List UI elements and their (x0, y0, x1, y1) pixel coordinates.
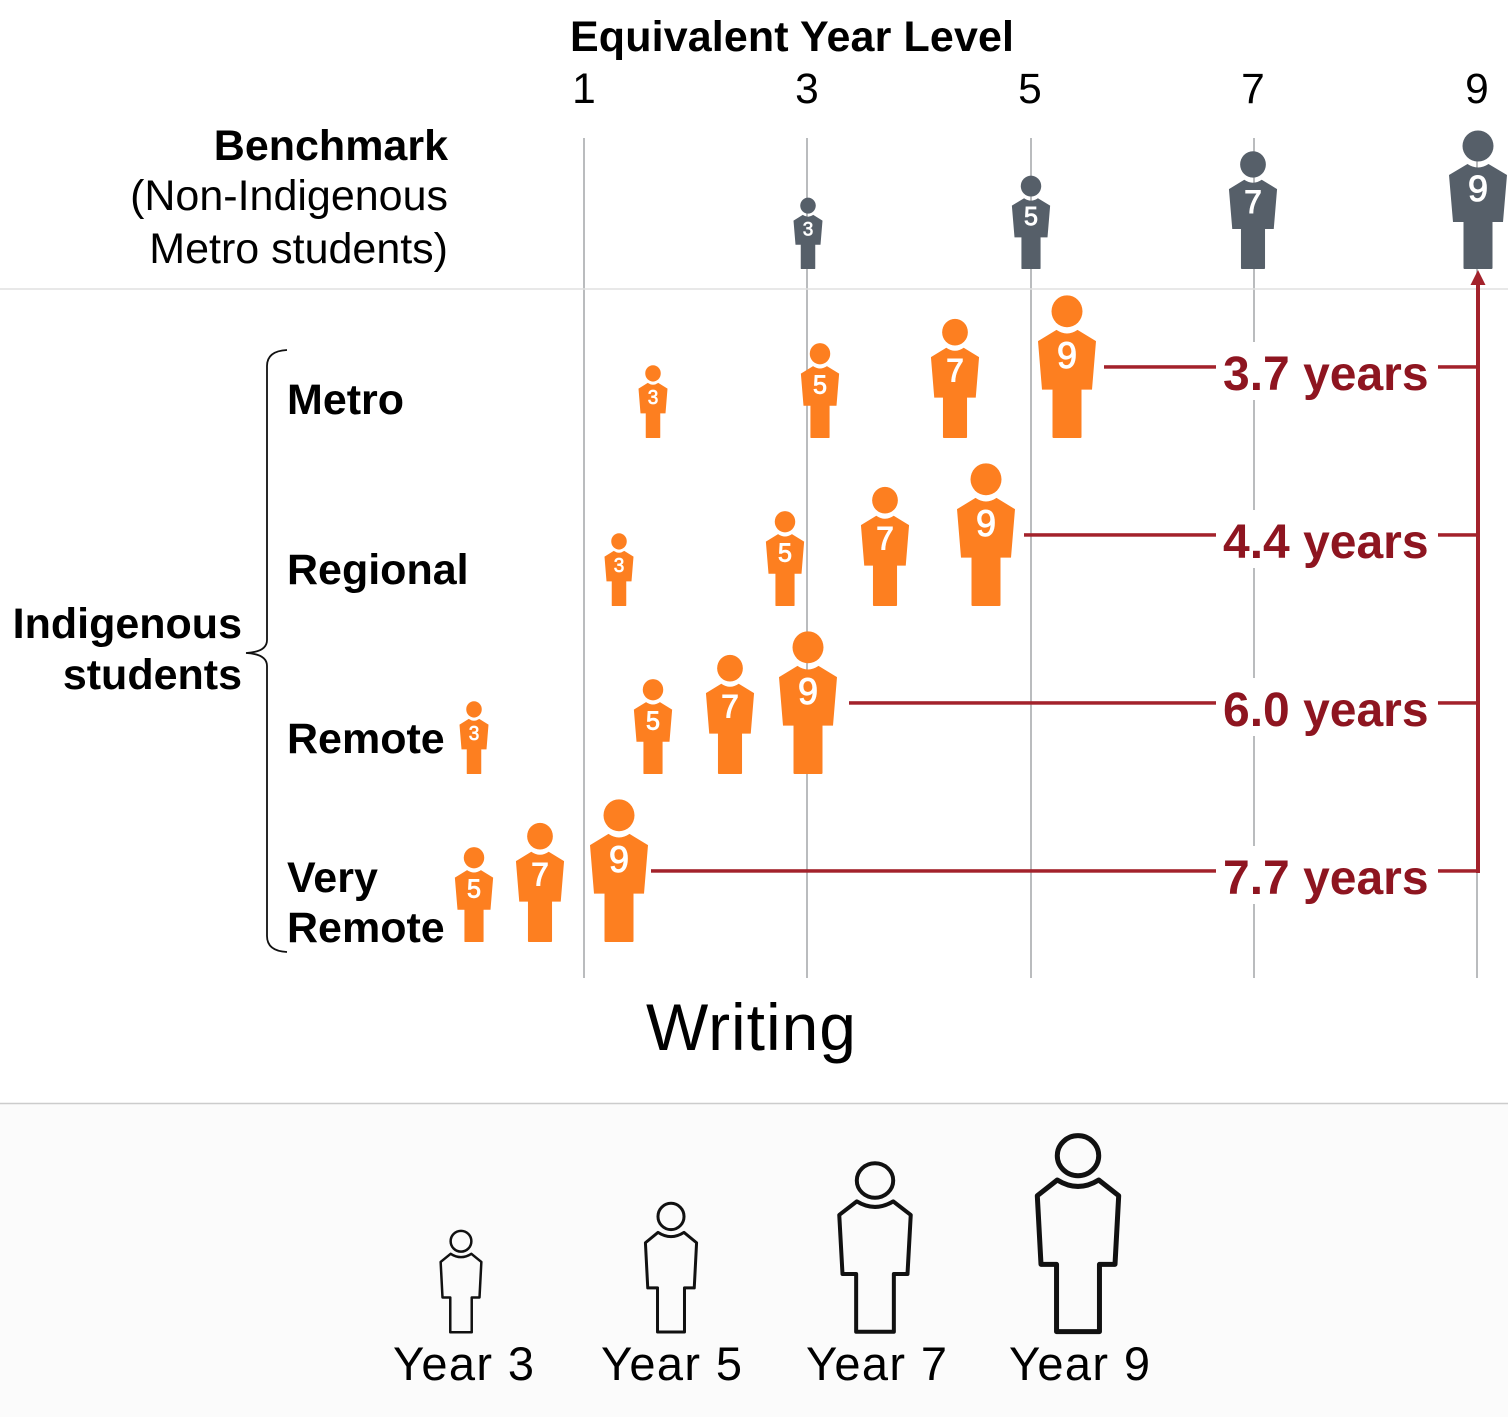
row labels: Remote (287, 904, 445, 952)
legend icon: Year 5 (645, 1203, 697, 1332)
axis numbers (572, 66, 1489, 113)
figures: Metro row: 7 (946, 352, 964, 388)
legend labels: Year 3 (393, 1337, 534, 1390)
axis title: Equivalent Year Level (570, 13, 1014, 61)
legend icon: Year 3 (441, 1231, 481, 1332)
figures: Remote row (460, 631, 837, 774)
chart title: Writing: Writing (646, 990, 856, 1064)
benchmark label (130, 122, 448, 273)
figure: benchmark year 3 (794, 198, 822, 269)
figures: Very Remote row: 9 (609, 838, 629, 880)
figures: Regional row: 7 (876, 520, 894, 556)
benchmark label: Benchmark (214, 122, 448, 170)
figure: benchmark year 9 (1449, 130, 1507, 269)
figure: benchmark year 5: 5 (1024, 203, 1038, 231)
figure: benchmark year 9: 9 (1468, 168, 1488, 209)
legend icon: Year 9 (1037, 1136, 1119, 1332)
figures: Remote row: 5 (646, 707, 660, 736)
gap label: 6.0 years: 6.0 years (1223, 684, 1429, 737)
row labels: Regional (287, 546, 469, 594)
axis numbers: 5 (1018, 66, 1042, 113)
gap label: 7.7 years: 7.7 years (1223, 852, 1429, 905)
group label: Indigenous students: students (63, 651, 242, 699)
axis numbers: 1 (572, 66, 596, 113)
axis numbers: 3 (795, 66, 819, 113)
figures: Remote row: 3 (469, 722, 479, 745)
figure: benchmark year 7 (1229, 151, 1277, 269)
figure: benchmark year 7: 7 (1244, 184, 1262, 220)
benchmark figures (794, 130, 1507, 269)
figures: Very Remote row: 7 (531, 856, 549, 892)
axis numbers: 7 (1241, 66, 1265, 113)
figure: benchmark year 3: 3 (803, 219, 813, 241)
figures: Regional row: 5 (778, 539, 792, 568)
figures: Regional row: 3 (614, 554, 624, 577)
legend icon: Year 7 (839, 1163, 911, 1332)
legend labels (393, 1337, 1150, 1390)
gap label: 3.7 years: 3.7 years (1223, 348, 1429, 401)
figures: Metro row: 5 (813, 371, 827, 400)
row labels: Remote (287, 715, 445, 763)
brace (246, 350, 287, 952)
figures: Very Remote row: 5 (467, 875, 481, 904)
row labels: Very (287, 854, 378, 902)
figures: Metro row: 9 (1057, 334, 1077, 376)
legend labels: Year 7 (806, 1337, 947, 1390)
group label: Indigenous students: Indigenous (13, 600, 242, 648)
figure: benchmark year 5 (1012, 176, 1050, 269)
figures: Remote row: 9 (798, 670, 818, 712)
gap label: 4.4 years: 4.4 years (1223, 516, 1429, 569)
legend panel background (0, 1103, 1508, 1417)
figures: Regional row (604, 463, 1015, 606)
group label: Indigenous students (13, 600, 242, 699)
legend labels: Year 5 (601, 1337, 742, 1390)
figures: Very Remote row (455, 799, 648, 942)
legend (441, 1136, 1119, 1332)
row labels (287, 376, 469, 952)
figures: Metro row (638, 295, 1096, 438)
benchmark label: Metro students) (149, 225, 448, 273)
vertical grid lines (584, 138, 1477, 978)
axis numbers: 9 (1465, 66, 1489, 113)
orange figures (455, 295, 1096, 942)
figures: Remote row: 7 (721, 688, 739, 724)
row labels: Metro (287, 376, 404, 424)
gap connectors and arrow (651, 270, 1486, 873)
benchmark label: (Non-Indigenous (130, 172, 448, 220)
figures: Regional row: 9 (976, 502, 996, 544)
figures: Metro row: 3 (648, 386, 658, 409)
legend labels: Year 9 (1009, 1337, 1150, 1390)
